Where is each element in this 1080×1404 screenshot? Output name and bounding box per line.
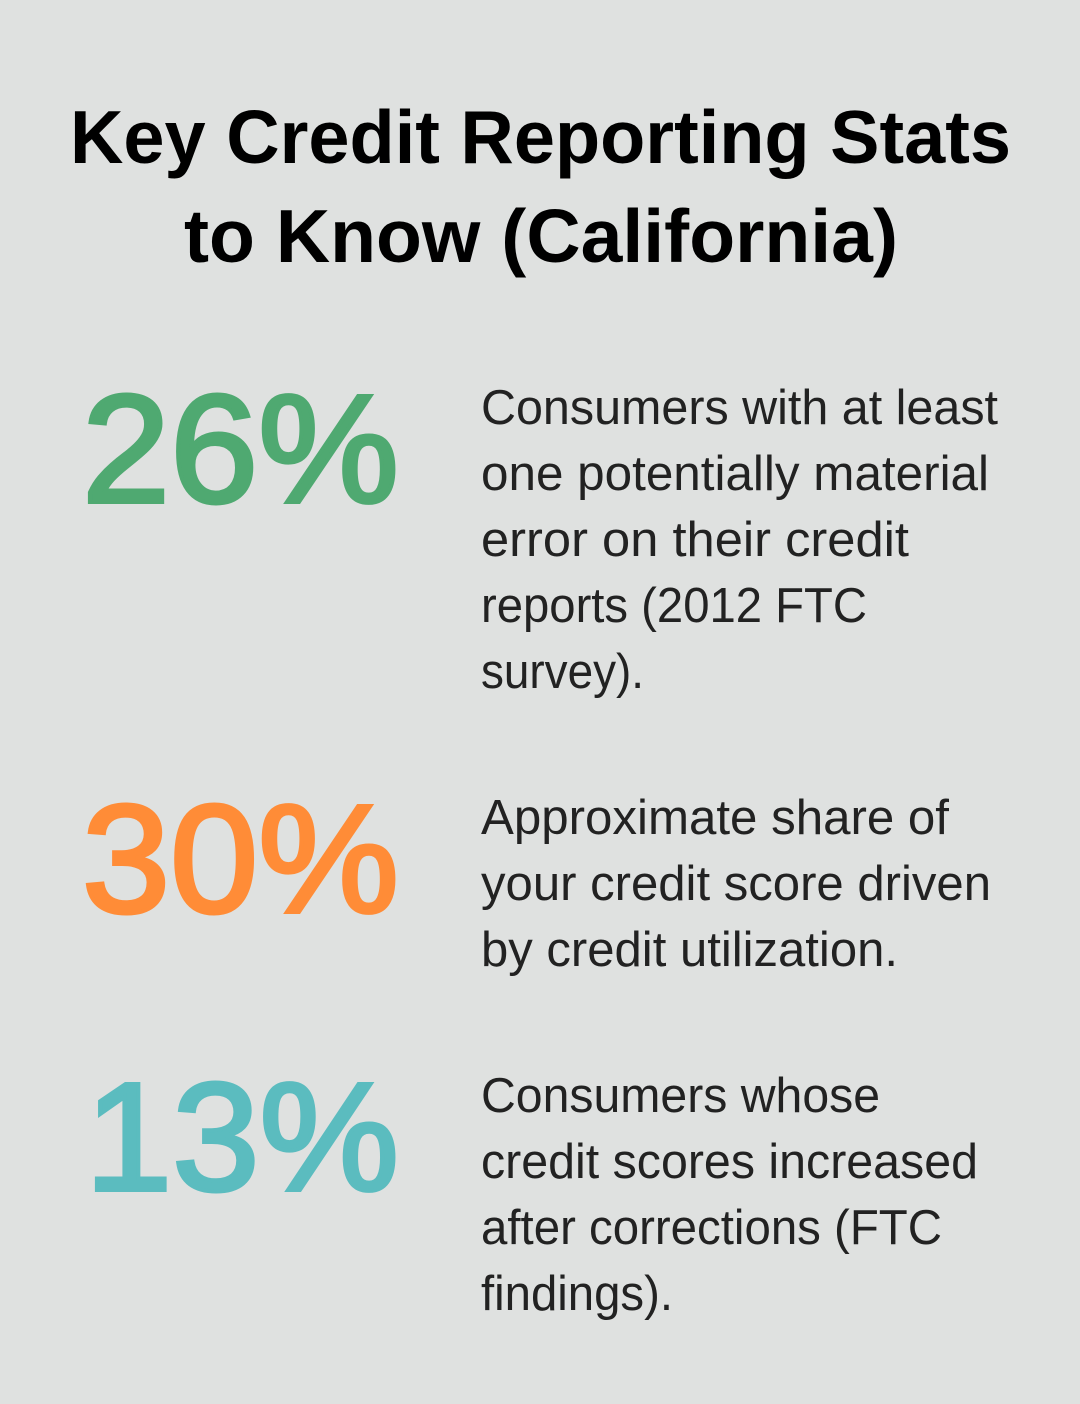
description: 13%: findings).	[481, 1267, 673, 1321]
description: 30%	[481, 791, 991, 977]
stat row: 30%	[82, 773, 991, 977]
description: 13%: after corrections (FTC	[481, 1201, 942, 1255]
title: Key Credit Reporting Stats	[70, 95, 1011, 179]
description: 26%: error on their credit	[481, 513, 909, 567]
number: 13%: 13%	[85, 1051, 399, 1223]
number: 26%: 26%	[82, 363, 399, 535]
description: 26%: Consumers with at least	[481, 381, 998, 435]
description: 13%	[481, 1069, 978, 1321]
description: 26%: survey).	[481, 645, 644, 699]
description: 13%: Consumers whose	[481, 1069, 880, 1123]
description: 26%: reports (2012 FTC	[481, 579, 867, 633]
title	[70, 95, 1011, 278]
description: 13%: credit scores increased	[481, 1135, 978, 1189]
description: 26%	[481, 381, 998, 699]
description: 30%: your credit score driven	[481, 857, 991, 911]
stat row: 13%	[85, 1051, 978, 1321]
description: 26%: one potentially material	[481, 447, 989, 501]
description: 30%: by credit utilization.	[481, 923, 898, 977]
title: to Know (California)	[184, 194, 898, 278]
stat row: 26%	[82, 363, 998, 699]
description: 30%: Approximate share of	[481, 791, 949, 845]
number: 30%: 30%	[82, 773, 399, 945]
